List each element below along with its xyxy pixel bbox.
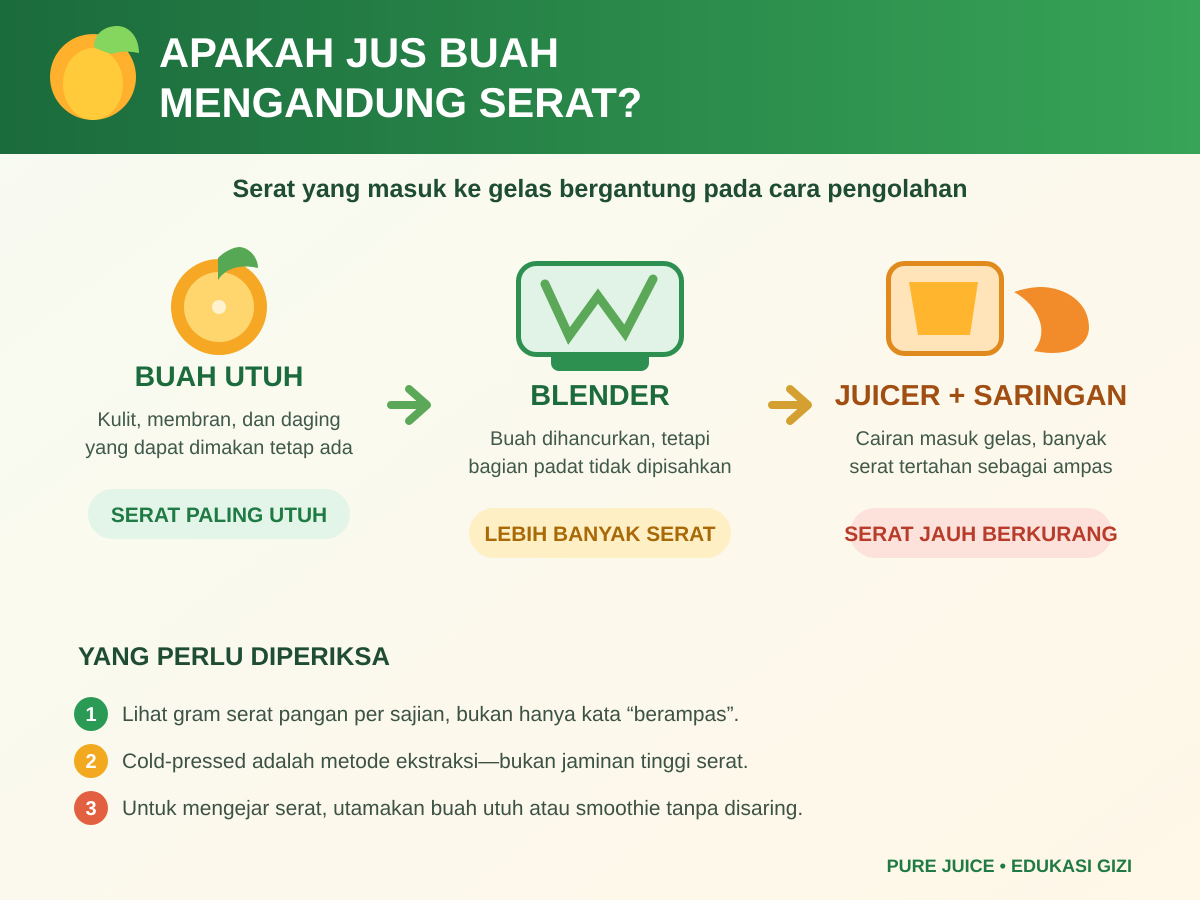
description: blender: bagian padat tidak dipisahkan bbox=[468, 456, 732, 478]
panel: juicer + saringan bbox=[835, 264, 1127, 558]
badge: serat paling utuh: SERAT PALING UTUH bbox=[111, 504, 327, 527]
badge: serat jauh berkurang bbox=[844, 508, 1118, 558]
title: APAKAH JUS BUAH bbox=[159, 29, 559, 76]
arrow: blender to juicer bbox=[772, 389, 808, 421]
checklist item 1: 1 bbox=[85, 704, 97, 726]
badge: serat paling utuh bbox=[88, 489, 350, 539]
heading: blender: BLENDER bbox=[530, 380, 670, 412]
panel: blender bbox=[468, 264, 732, 558]
checklist item 3 bbox=[74, 791, 803, 825]
badge: lebih banyak serat bbox=[469, 508, 731, 558]
checklist item 1: Lihat gram serat pangan per sajian, bukan hanya kata “berampas”. bbox=[122, 703, 739, 726]
description: buah utuh: Kulit, membran, dan daging bbox=[97, 409, 341, 431]
panel: buah utuh bbox=[85, 247, 354, 539]
description: juicer: Cairan masuk gelas, banyak bbox=[856, 428, 1107, 450]
checklist item 3: Untuk mengejar serat, utamakan buah utuh atau smoothie tanpa disaring. bbox=[122, 797, 803, 820]
checklist item 3: 3 bbox=[85, 798, 97, 820]
icon: whole fruit bbox=[171, 247, 267, 355]
icon: juicer bbox=[888, 264, 1089, 354]
arrow: buah to blender bbox=[391, 389, 427, 421]
heading: checklist: YANG PERLU DIPERIKSA bbox=[78, 643, 390, 671]
checklist item 2: 2 bbox=[85, 751, 97, 773]
header band bbox=[0, 0, 1200, 154]
checklist item 1 bbox=[74, 697, 739, 731]
subtitle: Serat yang masuk ke gelas bergantung pada cara pengolahan bbox=[233, 175, 967, 203]
heading: buah utuh: BUAH UTUH bbox=[135, 361, 303, 393]
description: juicer: serat tertahan sebagai ampas bbox=[849, 456, 1113, 478]
checklist item 2 bbox=[74, 744, 749, 778]
footer credit: PURE JUICE • EDUKASI GIZI bbox=[887, 856, 1132, 876]
title: MENGANDUNG SERAT? bbox=[159, 79, 642, 126]
badge: serat jauh berkurang: SERAT JAUH BERKURANG bbox=[844, 523, 1118, 546]
icon: header fruit bbox=[50, 26, 139, 120]
description: blender: Buah dihancurkan, tetapi bbox=[490, 428, 710, 450]
heading: juicer + saringan: JUICER + SARINGAN bbox=[835, 380, 1127, 412]
icon: blender bbox=[518, 264, 682, 371]
description: buah utuh: yang dapat dimakan tetap ada bbox=[85, 437, 354, 459]
badge: lebih banyak serat: LEBIH BANYAK SERAT bbox=[485, 523, 716, 546]
checklist item 2: Cold-pressed adalah metode ekstraksi—bukan jaminan tinggi serat. bbox=[122, 750, 749, 773]
